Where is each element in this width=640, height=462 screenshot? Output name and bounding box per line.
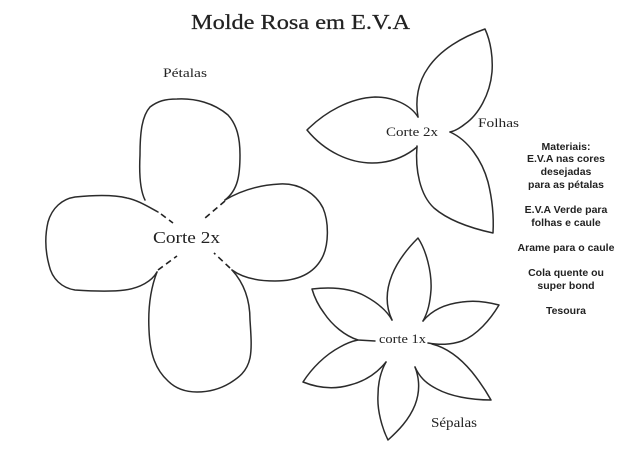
left leaf [307, 97, 418, 163]
materials list: Tesoura [546, 305, 586, 317]
bottom sepal [378, 362, 419, 440]
materials list: super bond [537, 280, 595, 292]
label: Sépalas: Sépalas [431, 415, 477, 430]
label: Corte 2x: Corte 2x [153, 228, 221, 247]
top leaf [417, 29, 492, 132]
cut lines [158, 201, 230, 270]
materials list: Arame para o caule [518, 242, 615, 254]
top sepal [387, 238, 431, 321]
materials list: para as pétalas [528, 179, 604, 191]
label: Corte 2x on leaves: Corte 2x [386, 124, 439, 139]
petal template [46, 99, 327, 392]
left petal [46, 196, 158, 291]
label: corte 1x: corte 1x [379, 331, 427, 346]
materials list: E.V.A nas cores [527, 153, 605, 165]
label: Pétalas: Pétalas [163, 65, 207, 80]
materials list: Materiais: [541, 141, 591, 153]
materials list: folhas e caule [531, 217, 601, 229]
materials list: E.V.A Verde para [525, 204, 608, 216]
right petal [225, 184, 327, 281]
label: Folhas: Folhas [478, 115, 519, 130]
top petal [140, 99, 240, 200]
upper left sepal [312, 288, 392, 341]
materials list [518, 141, 615, 317]
leaf template [307, 29, 493, 233]
materials list: desejadas [541, 166, 592, 178]
lower right sepal [415, 344, 491, 400]
lower left sepal [303, 340, 386, 388]
bottom petal [149, 270, 251, 392]
sepal template [303, 238, 499, 440]
title: Molde Rosa em E.V.A [191, 10, 411, 34]
lower leaf [417, 132, 493, 233]
materials list: Cola quente ou [528, 267, 604, 279]
right sepal [423, 301, 499, 344]
